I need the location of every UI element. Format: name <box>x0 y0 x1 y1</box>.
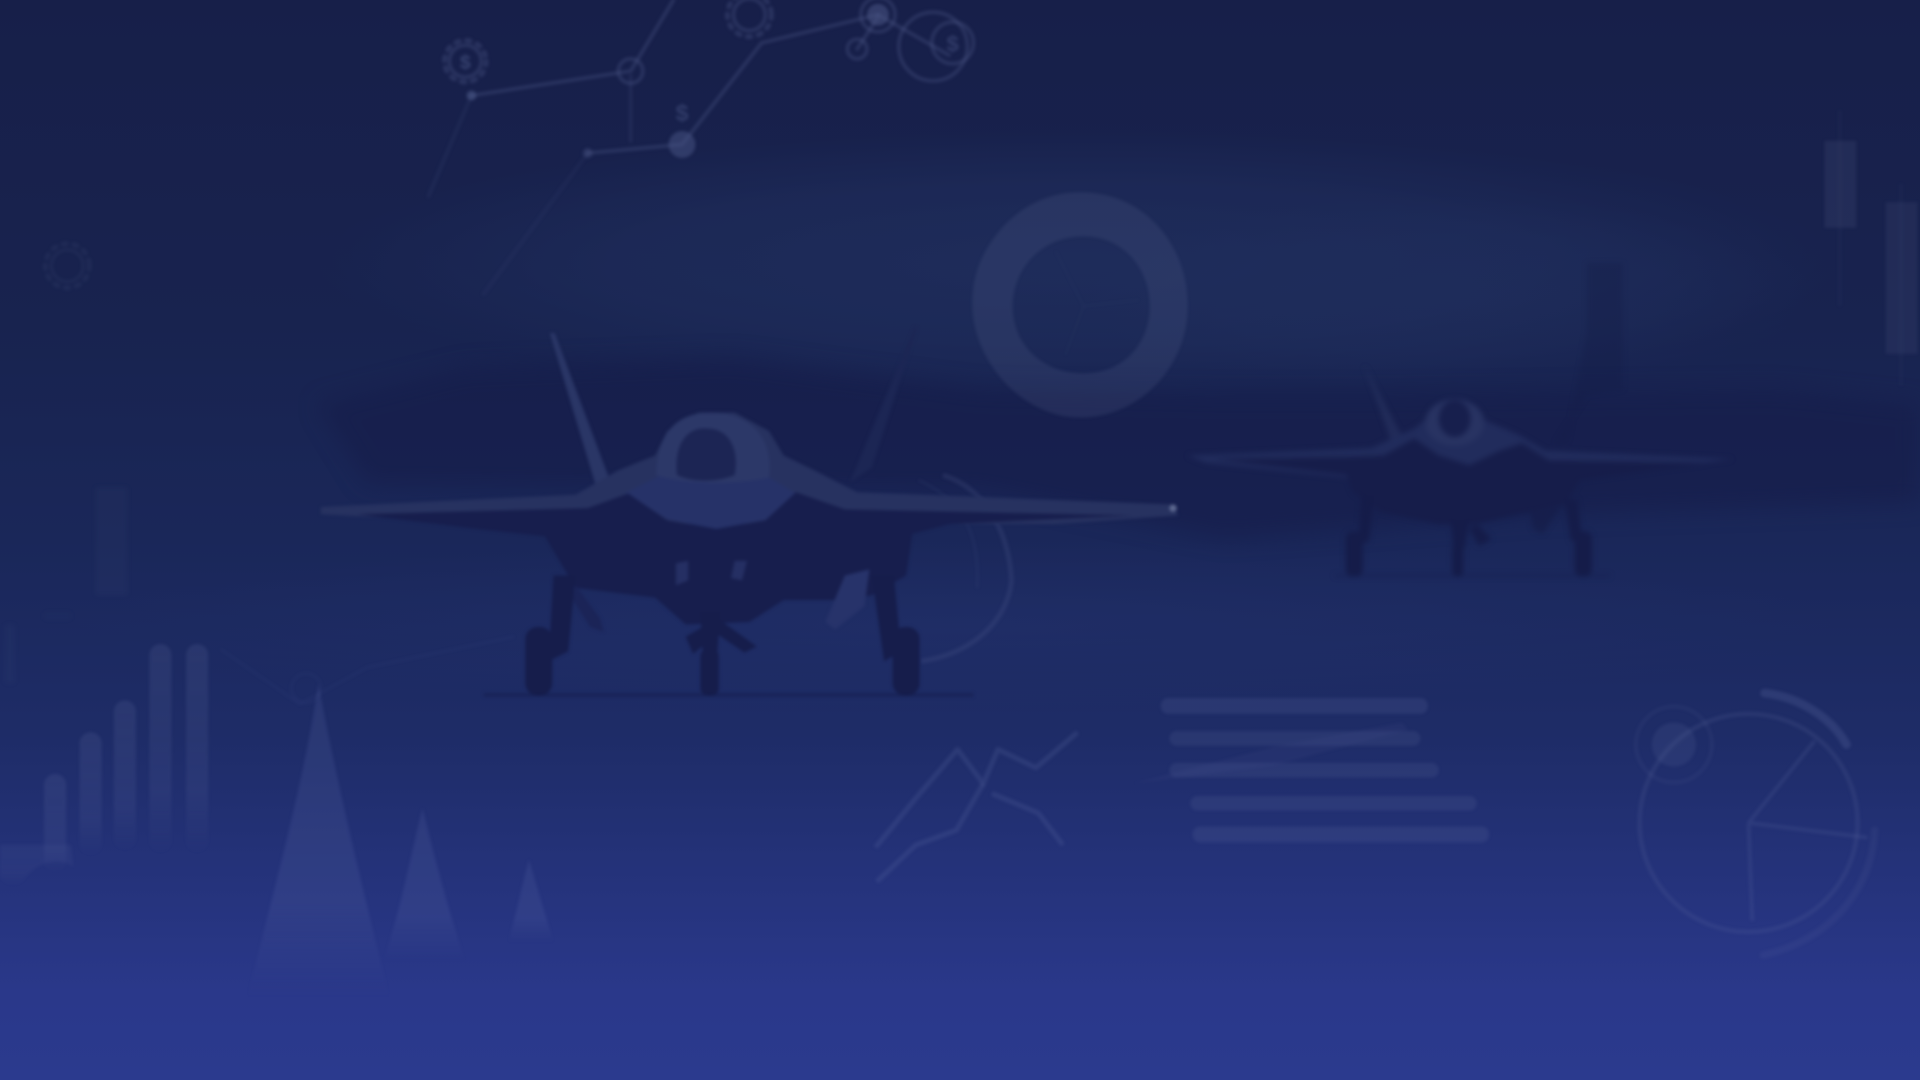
runway lighter haze <box>73 539 1837 710</box>
jet 2 tails <box>1364 263 1622 443</box>
radial gauge lower right <box>1636 693 1875 955</box>
icon: dollar signs: $ <box>947 31 959 56</box>
candlestick chart top right <box>1824 110 1918 386</box>
jet 2 ground shadow <box>1335 574 1610 577</box>
arc gauge behind jet <box>918 475 1011 661</box>
faint curve above peaks <box>220 637 514 704</box>
icon: dollar signs: $ <box>676 100 689 126</box>
gauge outer arcs <box>1764 693 1847 744</box>
triangle peaks chart <box>247 683 553 998</box>
jet 2 gear <box>1346 496 1592 577</box>
icon: dollar gear left <box>444 40 486 82</box>
jet 1 canopy <box>656 413 770 483</box>
jet 1 underside <box>358 492 1133 624</box>
icon: faint gear left <box>45 244 89 288</box>
network lines <box>429 0 949 294</box>
jet 2 underside <box>1212 438 1708 524</box>
line chart lower centre <box>876 732 1078 882</box>
network diagram <box>45 0 973 294</box>
jet 2 canopy <box>1425 399 1484 446</box>
icon: gear top <box>727 0 771 37</box>
jet 1 ground shadow <box>484 693 973 697</box>
jet 1 highlights <box>676 504 1177 585</box>
jet 2 wings <box>1188 419 1733 478</box>
hazy sky glow <box>318 129 1837 398</box>
jet 1 tails <box>550 327 917 487</box>
icon: dollar gear left: $ <box>460 52 471 74</box>
icon: dollar signs <box>676 31 959 126</box>
gauge ring <box>1640 714 1858 932</box>
list bars lower centre <box>1133 698 1489 842</box>
jet 1 nose <box>624 475 796 529</box>
jet 1 left gear <box>525 576 604 696</box>
second jet <box>1188 263 1733 577</box>
network nodes <box>467 0 973 158</box>
bar chart lower left <box>0 644 208 885</box>
donut chart <box>972 192 1188 418</box>
jet 1 wings <box>321 413 1178 524</box>
first jet <box>321 327 1178 697</box>
gauge small dial <box>1636 707 1712 782</box>
candlestick chart left <box>5 487 127 683</box>
jet 1 nose gear <box>686 612 757 696</box>
jet 1 right gear <box>825 569 920 696</box>
dark horizon band <box>318 358 1920 539</box>
gauge spokes <box>1749 741 1867 921</box>
